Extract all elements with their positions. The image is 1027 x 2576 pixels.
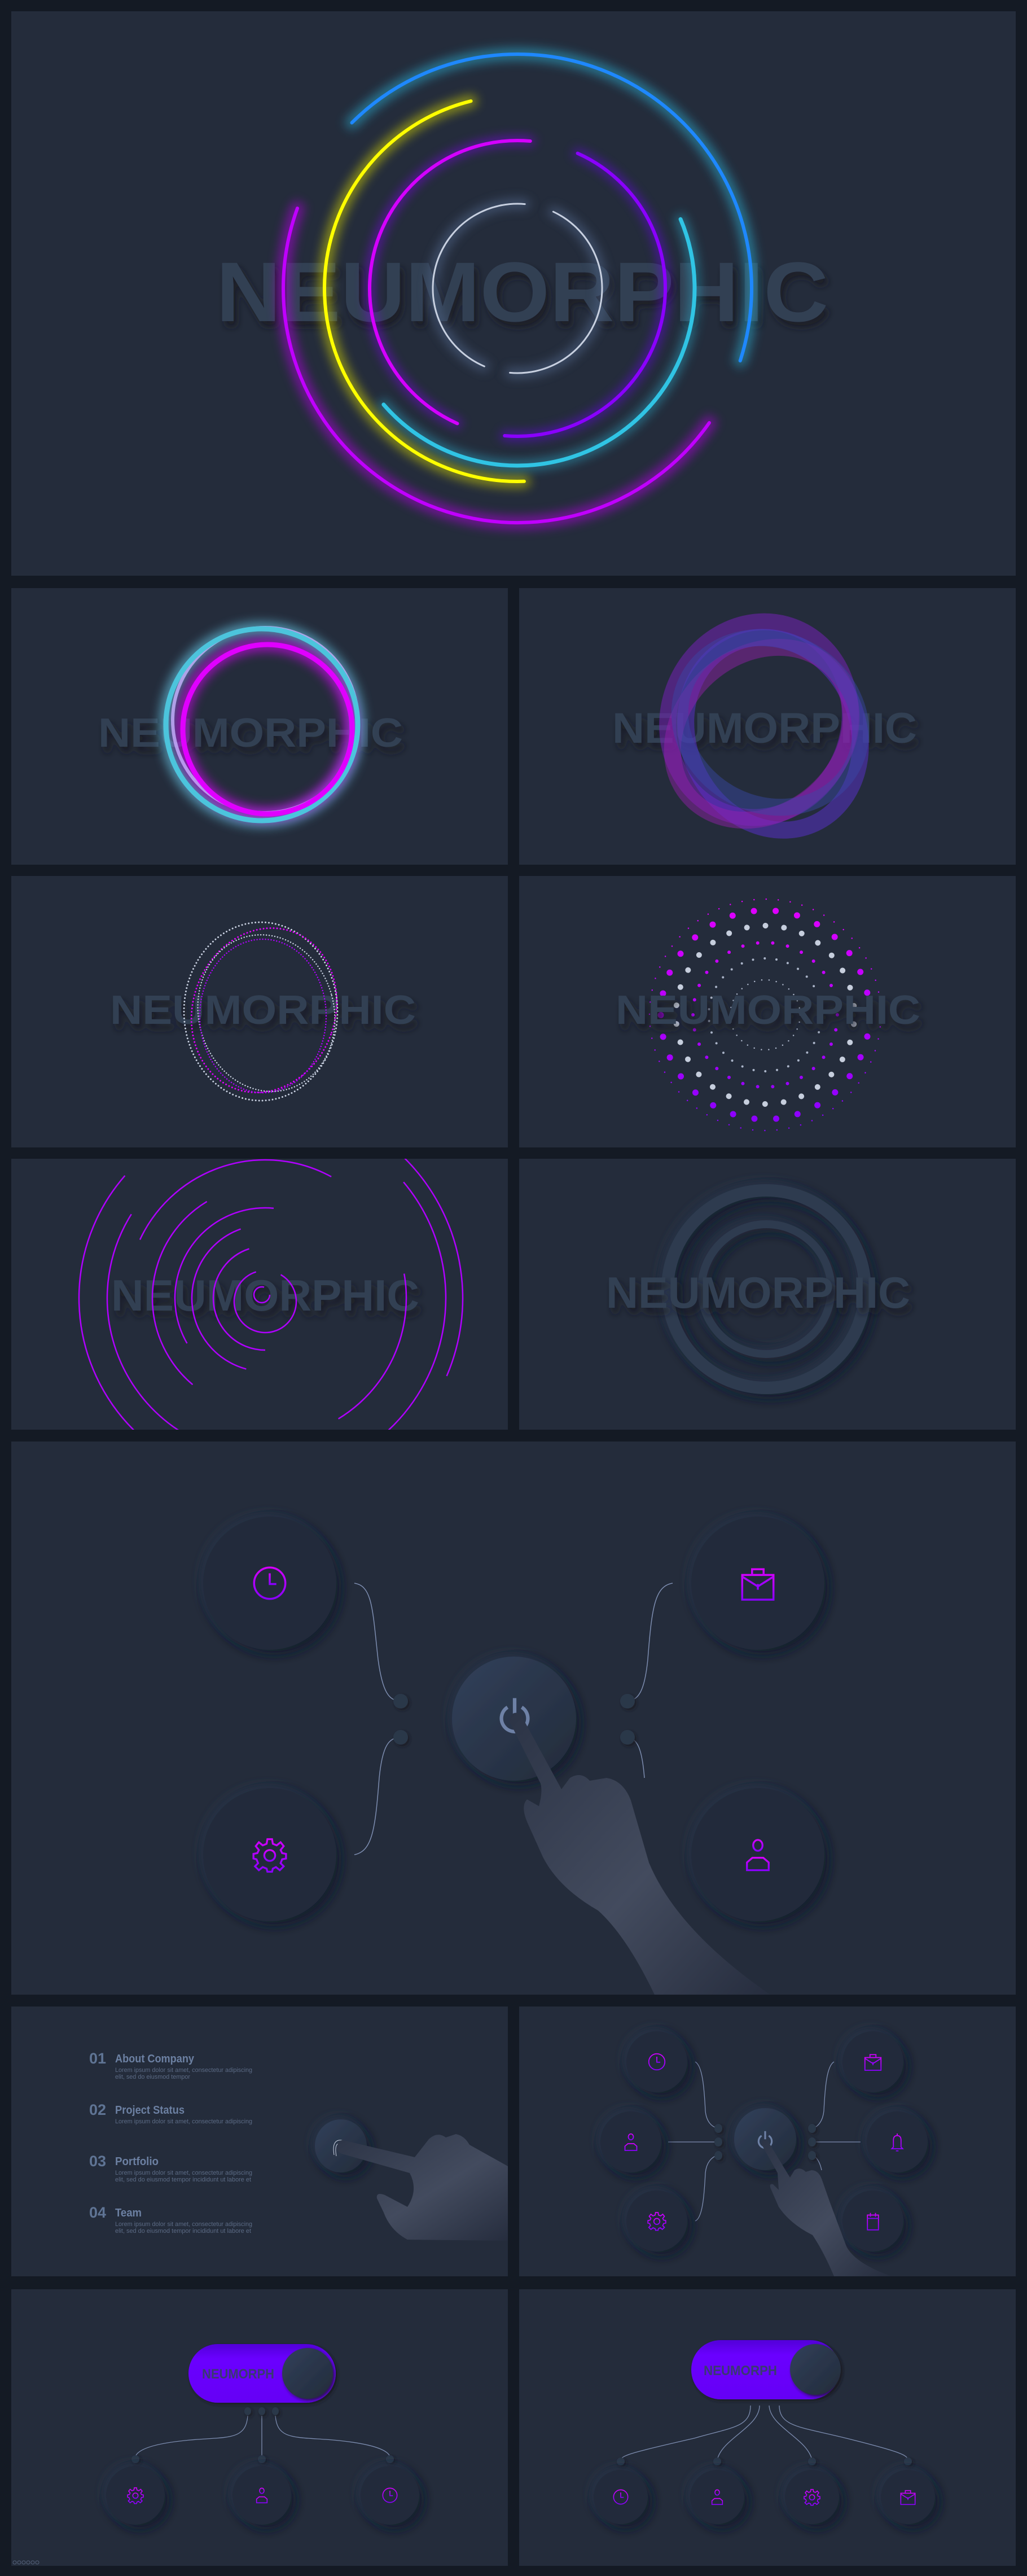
- list item 01: About Company: [115, 2053, 195, 2065]
- button: gear: [626, 2191, 687, 2251]
- button: briefcase: [881, 2470, 935, 2524]
- list item 03: Portfolio: [115, 2156, 159, 2168]
- dotted circles: [169, 908, 359, 1113]
- panel title text: NEUMORPHIC: [612, 704, 917, 752]
- panel title text: NEUMORPHIC: [98, 711, 403, 756]
- panel: six icon power menu: [519, 2007, 1016, 2276]
- connector lines: [668, 2062, 861, 2221]
- panel: toggle with three icons: [11, 2289, 508, 2566]
- connector dots: [131, 2407, 394, 2463]
- panel title text: NEUMORPHIC: [111, 1271, 419, 1320]
- panel: neon ring: [11, 588, 508, 865]
- button: clock: [594, 2470, 648, 2524]
- toggle switch: [691, 2340, 841, 2399]
- center power button: [734, 2108, 796, 2170]
- button: person: [232, 2466, 291, 2525]
- hero title text: NEUMORPHIC: [216, 244, 828, 339]
- button: gear: [203, 1788, 336, 1921]
- button: clock: [626, 2031, 687, 2092]
- list item 01: 01: [89, 2050, 106, 2067]
- panel title text: NEUMORPHIC: [110, 988, 416, 1033]
- button: person: [600, 2111, 661, 2172]
- list item 04: [89, 2204, 252, 2235]
- hand pointing: [337, 2134, 508, 2241]
- fingerprint button: [315, 2119, 367, 2172]
- overlapping ellipses: [638, 596, 892, 859]
- hand pressing button: [762, 2140, 892, 2276]
- panel: agenda list with hand: [11, 2007, 508, 2276]
- list item 04: 04: [89, 2204, 106, 2221]
- dot rings: [649, 899, 881, 1131]
- list item 04: elit, sed do eiusmod tempor incididunt ut labore et: [115, 2228, 251, 2235]
- button: bell: [867, 2111, 928, 2172]
- button: person: [691, 1788, 824, 1921]
- toggle switch: NEUMORPH: [202, 2367, 274, 2382]
- center power button: [452, 1657, 576, 1781]
- connector dots: [617, 2457, 912, 2465]
- connector lines: [135, 2416, 390, 2456]
- purple arcs: [78, 1159, 464, 1430]
- panel: dot halftone ring: [519, 876, 1016, 1147]
- button: clock: [361, 2466, 419, 2525]
- toggle switch: NEUMORPH: [704, 2363, 777, 2378]
- panel title text: NEUMORPHIC: [606, 1268, 910, 1317]
- button: person: [690, 2470, 744, 2524]
- list item 02: [89, 2101, 252, 2125]
- button: briefcase: [842, 2031, 903, 2092]
- connector lines: [354, 1583, 673, 1855]
- list item 04: Lorem ipsum dolor sit amet, consectetur adipiscing: [115, 2221, 252, 2228]
- list item 01: Lorem ipsum dolor sit amet, consectetur adipiscing: [115, 2067, 252, 2074]
- panel: toggle with four icons: [519, 2289, 1016, 2566]
- list item 02: 02: [89, 2101, 106, 2118]
- panel title text: NEUMORPHIC: [616, 988, 920, 1033]
- button: calendar: [842, 2191, 903, 2251]
- list item 03: [89, 2153, 252, 2183]
- connector dots: [393, 1694, 635, 1745]
- list item 03: elit, sed do eiusmod tempor incididunt ut labore et: [115, 2176, 251, 2183]
- panel: neumorphic rings: [519, 1159, 1016, 1430]
- list item 03: 03: [89, 2153, 106, 2170]
- list item 01: elit, sed do eiusmod tempor: [115, 2074, 190, 2080]
- raised rings: [668, 1190, 865, 1388]
- list item 02: Project Status: [115, 2104, 185, 2117]
- connector lines: [621, 2406, 908, 2460]
- connector dots: [714, 2124, 816, 2160]
- panel: dotted rings: [11, 876, 508, 1147]
- button: clock: [203, 1517, 336, 1650]
- button: gear: [106, 2466, 165, 2525]
- panel: concentric arcs: [11, 1159, 508, 1430]
- tiny footer icons: [13, 2561, 39, 2564]
- neon arcs: [186, 0, 849, 620]
- button: gear: [785, 2470, 839, 2524]
- hand pressing button: [510, 1713, 770, 1995]
- list item 01: [89, 2050, 252, 2080]
- list item 02: Lorem ipsum dolor sit amet, consectetur adipiscing: [115, 2118, 252, 2125]
- panel: hero neon rings: [11, 0, 1016, 620]
- panel: power button menu: [11, 1442, 1016, 1995]
- list item 03: Lorem ipsum dolor sit amet, consectetur adipiscing: [115, 2170, 252, 2176]
- button: briefcase: [691, 1517, 824, 1650]
- glowing rings: [166, 628, 358, 821]
- list item 04: Team: [115, 2207, 142, 2219]
- panel: translucent ellipses: [519, 588, 1016, 865]
- toggle switch: [188, 2344, 336, 2403]
